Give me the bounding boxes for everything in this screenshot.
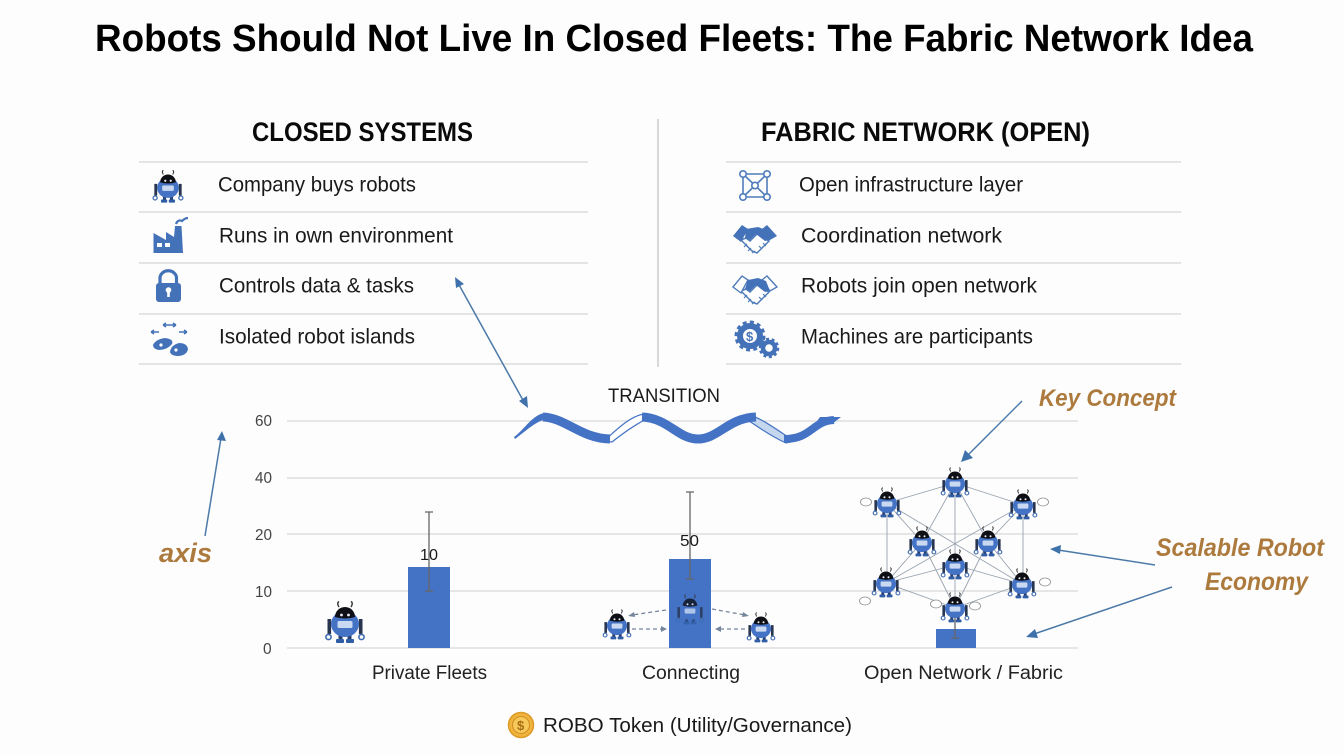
text: controls data and tasks: Controls data & tasks bbox=[219, 274, 414, 298]
axis tick labels: 0 bbox=[263, 641, 272, 658]
robot: inner right bbox=[974, 527, 1002, 556]
axis tick labels bbox=[255, 413, 272, 658]
transition label: TRANSITION bbox=[608, 385, 720, 407]
icon: gears: $ bbox=[746, 329, 754, 344]
error bar: open network bbox=[951, 618, 959, 638]
robot: left bbox=[603, 610, 631, 639]
callout: scalable robot economy: Economy bbox=[1205, 568, 1309, 596]
text: company buys robots: Company buys robots bbox=[218, 174, 416, 196]
axis tick labels: 10 bbox=[255, 584, 272, 601]
heading: fabric network: FABRIC NETWORK (OPEN) bbox=[761, 117, 1090, 147]
value label: 10: 10 bbox=[420, 547, 438, 564]
icon: network square bbox=[740, 171, 770, 200]
icon: factory bbox=[154, 218, 188, 253]
category label: connecting: Connecting bbox=[642, 663, 740, 684]
panel: closed systems bbox=[139, 117, 588, 364]
category label: open network / fabric: Open Network / Fabric bbox=[864, 663, 1063, 684]
text: machines are participants: Machines are participants bbox=[801, 326, 1033, 348]
callout: scalable robot economy bbox=[1156, 534, 1326, 596]
heading: closed systems: CLOSED SYSTEMS bbox=[252, 117, 473, 147]
robot: bottom bbox=[941, 593, 969, 622]
text: robots join open network: Robots join open network bbox=[801, 274, 1037, 298]
icon: handshake solid bbox=[733, 225, 777, 253]
icon: padlock bbox=[156, 271, 181, 302]
robot: lower right bbox=[1008, 569, 1036, 598]
robot: inner left bbox=[908, 527, 936, 556]
text: runs in own environment: Runs in own environment bbox=[219, 224, 453, 248]
robot: single private fleet bbox=[326, 602, 364, 643]
arrow: economy to bar bbox=[1026, 587, 1172, 638]
icon: robot bbox=[153, 170, 183, 203]
icon: isolated islands bbox=[151, 323, 188, 356]
axis tick labels: 20 bbox=[255, 527, 272, 544]
arrow: key concept bbox=[961, 401, 1022, 462]
error bar: private fleets bbox=[425, 512, 433, 591]
speech bubbles bbox=[860, 498, 1050, 610]
icon: handshake outline bbox=[733, 276, 777, 304]
bar: connecting bbox=[669, 559, 711, 648]
callout: scalable robot economy: Scalable Robot bbox=[1156, 534, 1326, 562]
arrow: scalable to network bbox=[1050, 545, 1155, 565]
dashed arrows bbox=[628, 609, 749, 632]
panel: fabric network bbox=[726, 117, 1181, 364]
error bar: connecting bbox=[686, 492, 694, 579]
arrow: closed systems to transition bbox=[455, 277, 528, 408]
callout: axis: axis bbox=[159, 538, 212, 568]
transition ribbon bbox=[514, 413, 841, 443]
network links bbox=[886, 483, 1023, 608]
robot: right bbox=[747, 613, 775, 642]
legend: robo token bbox=[508, 712, 852, 738]
legend text: ROBO Token (Utility/Governance) bbox=[543, 715, 852, 737]
arrow: axis bbox=[205, 431, 226, 536]
bar: open network bbox=[936, 629, 976, 648]
robot: lower left bbox=[872, 568, 900, 597]
axis tick labels: 60 bbox=[255, 413, 272, 430]
text: coordination network: Coordination network bbox=[801, 224, 1002, 248]
icon: gears bbox=[736, 322, 778, 357]
callout: key concept: Key Concept bbox=[1039, 385, 1177, 412]
robot: centre bbox=[941, 550, 969, 579]
robot: upper right bbox=[1009, 490, 1037, 519]
text: isolated robot islands: Isolated robot islands bbox=[219, 326, 415, 348]
robot: upper left bbox=[873, 488, 901, 517]
network of robots bbox=[860, 468, 1050, 638]
robot: inside bar bbox=[676, 595, 704, 624]
robot: top bbox=[941, 468, 969, 497]
bar chart bbox=[255, 413, 1078, 684]
connecting robots group bbox=[603, 595, 775, 642]
divider between panels bbox=[657, 119, 659, 367]
axis tick labels: 40 bbox=[255, 470, 272, 487]
icon: coin bbox=[508, 712, 534, 738]
bar: private fleets bbox=[408, 567, 450, 648]
text: open infrastructure layer: Open infrastructure layer bbox=[799, 174, 1023, 196]
category label: private fleets: Private Fleets bbox=[372, 663, 487, 684]
value label: 50: 50 bbox=[680, 533, 699, 550]
title: Robots Should Not Live In Closed Fleets: The Fabric Network Idea bbox=[95, 18, 1254, 60]
icon: coin: $ bbox=[517, 718, 525, 733]
